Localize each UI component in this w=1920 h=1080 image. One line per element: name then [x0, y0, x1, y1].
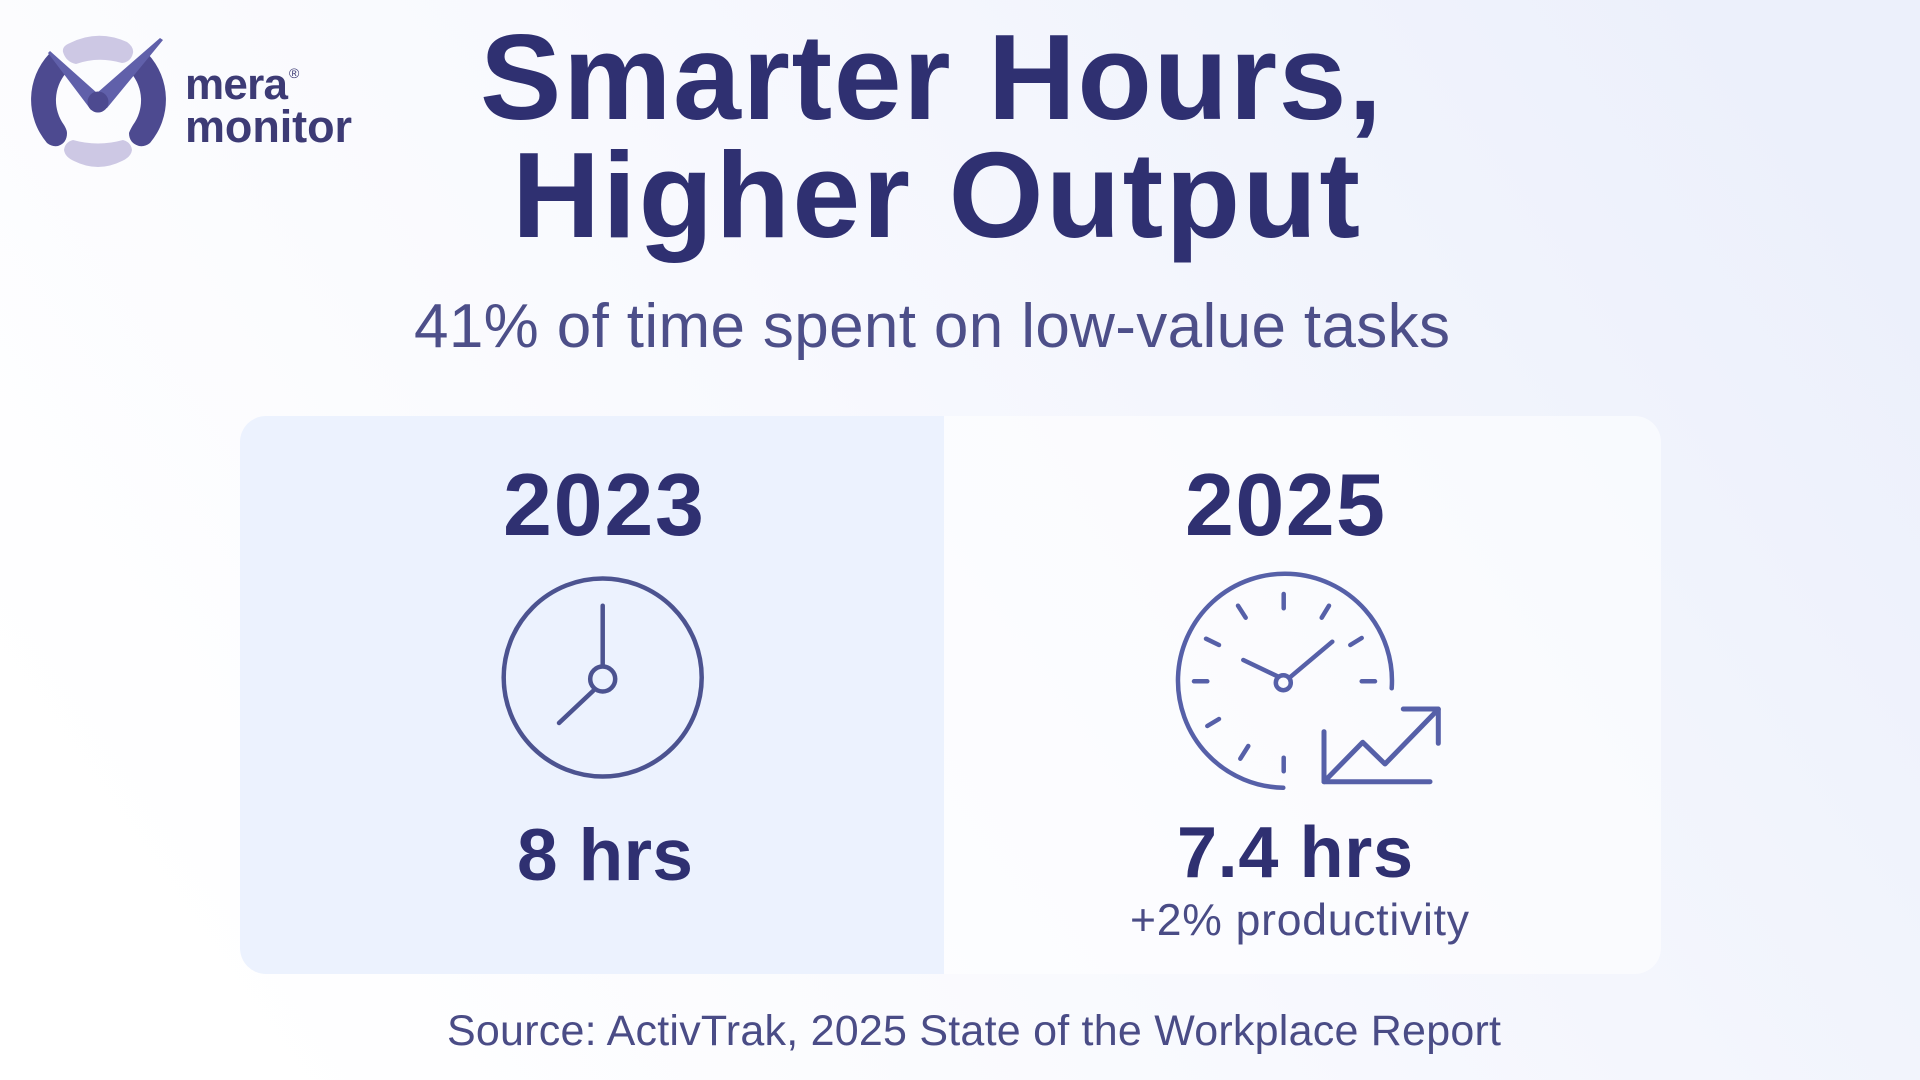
2023 hours: 8 hrs — [517, 815, 693, 896]
icon: clock with growth chart — [1178, 574, 1438, 788]
logo: mera monitor — [31, 36, 352, 167]
logo wordmark: mera — [185, 60, 289, 109]
panel: 2025 background — [240, 416, 1661, 974]
2025 heading: 2025 — [1185, 455, 1385, 554]
source line: Source: ActivTrak, 2025 State of the Workplace Report — [447, 1007, 1501, 1055]
subtitle: 41% of time spent on low-value tasks — [414, 292, 1450, 361]
panel: comparison card — [240, 416, 1661, 974]
icon: simple clock — [504, 578, 702, 776]
logo wordmark: ® — [289, 65, 300, 81]
title: Smarter Hours, — [480, 9, 1382, 145]
2025 hours: 7.4 hrs — [1177, 813, 1413, 893]
2023 heading: 2023 — [503, 455, 704, 554]
productivity note: +2% productivity — [1130, 896, 1470, 945]
2023 background — [240, 416, 944, 974]
panel: 2025 — [1130, 455, 1470, 945]
logo wordmark: monitor — [185, 101, 352, 152]
logo icon — [31, 36, 166, 167]
panel: 2023 — [240, 416, 944, 974]
logo wordmark — [185, 60, 352, 152]
title: Higher Output — [512, 127, 1360, 263]
title — [480, 9, 1382, 263]
